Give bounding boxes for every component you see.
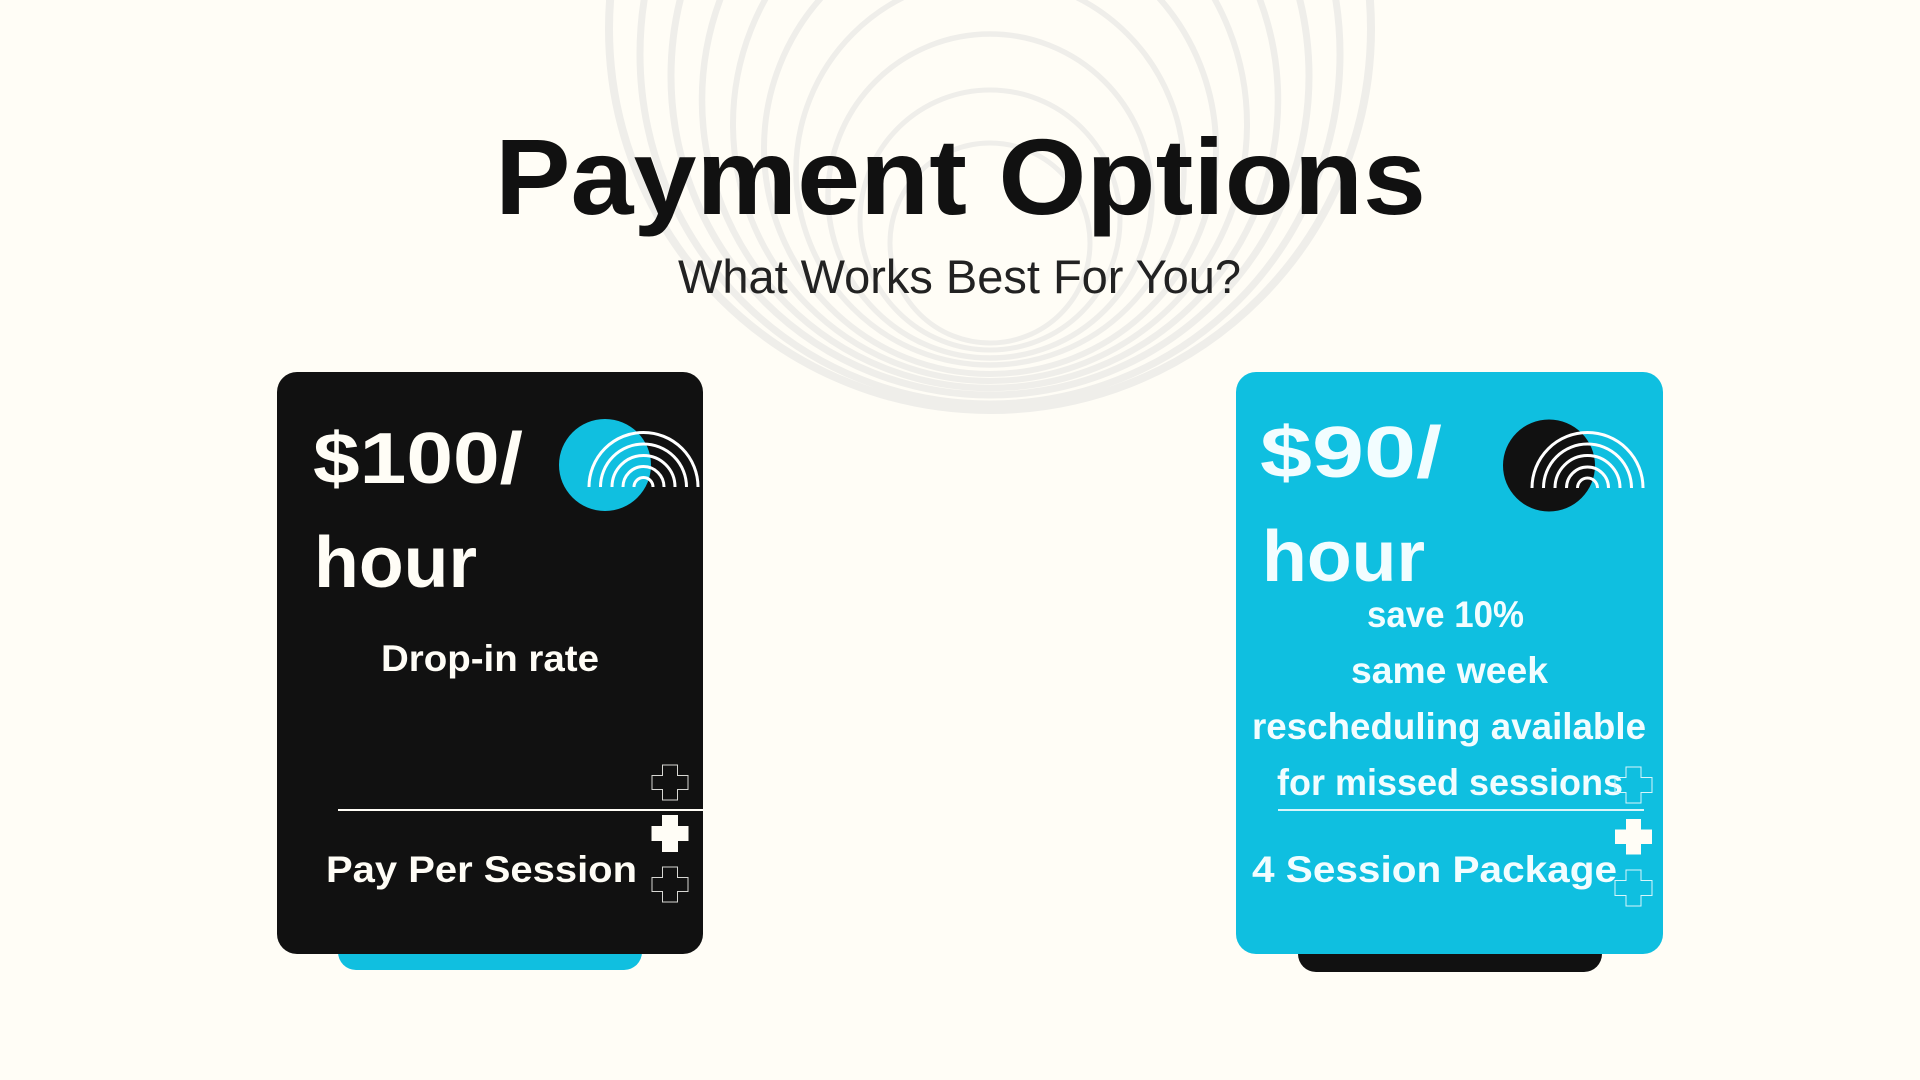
description (1252, 594, 1646, 803)
description: for missed sessions (1277, 762, 1623, 803)
label: 4 session package: 4 Session Package (1252, 849, 1617, 890)
icon: plus filled (1615, 819, 1652, 854)
panel: drop-in rate card (277, 372, 703, 970)
price: $100/ (313, 419, 523, 499)
icon: plus outline bottom (1615, 870, 1652, 906)
icon: plus filled (652, 815, 688, 852)
divider line (1278, 809, 1644, 811)
price: hour (1262, 517, 1425, 597)
icon: plus outline top (652, 765, 688, 800)
icon: circle with arcs (1503, 420, 1643, 512)
label: pay per session: Pay Per Session (326, 849, 637, 890)
decorative concentric rings behind title (609, 0, 1371, 410)
card tab: cyan (338, 940, 642, 970)
icon: plus outline top (1615, 767, 1652, 803)
subtitle: What Works Best For You? (678, 250, 1241, 303)
price: hour (314, 523, 477, 603)
panel: 4 session package card (1236, 372, 1663, 972)
description: save 10% (1367, 594, 1524, 635)
description: rescheduling available (1252, 706, 1646, 747)
price (1260, 413, 1442, 597)
card body: black (277, 372, 703, 954)
description: same week (1351, 650, 1548, 691)
card tab: black (1298, 940, 1602, 972)
title: Payment Options (495, 116, 1426, 237)
icon: circle with arcs (559, 419, 698, 511)
description: Drop-in rate (381, 638, 599, 679)
card body: cyan (1236, 372, 1663, 954)
price: $90/ (1260, 413, 1442, 493)
icon: plus outline bottom (652, 867, 688, 902)
divider line (338, 809, 703, 811)
price (313, 419, 523, 603)
